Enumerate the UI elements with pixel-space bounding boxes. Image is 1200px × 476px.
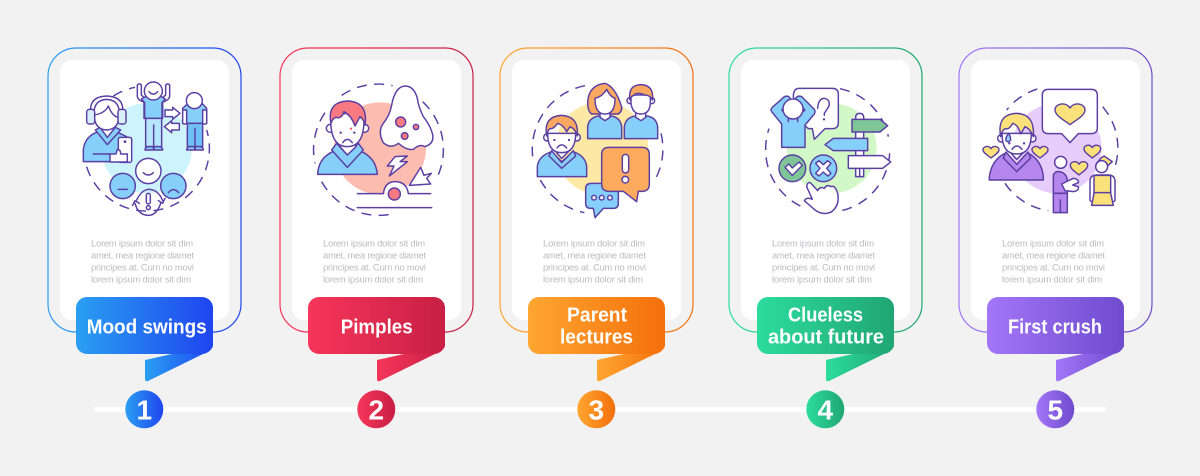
label tag: Mood swings bbox=[87, 316, 207, 338]
panel: Clueless about future bbox=[729, 48, 922, 428]
body text: amet, mea regione diamet bbox=[543, 250, 646, 261]
panel: Parent lectures bbox=[500, 48, 693, 428]
icon: first crush bbox=[983, 89, 1118, 213]
body text: amet, mea regione diamet bbox=[91, 250, 194, 261]
white inner card bbox=[741, 60, 910, 320]
label tag bbox=[757, 297, 894, 381]
label tag: First crush bbox=[1008, 316, 1102, 338]
label tag: Parent bbox=[567, 304, 627, 326]
step number 2 bbox=[357, 390, 395, 428]
label tag bbox=[987, 297, 1124, 381]
step number 4: 4 bbox=[818, 394, 834, 426]
step number 2: 2 bbox=[369, 394, 384, 426]
icon: mood swings teen bbox=[83, 82, 209, 215]
label tag: about future bbox=[768, 326, 884, 348]
white inner card bbox=[292, 60, 461, 320]
step number 5 bbox=[1036, 390, 1074, 428]
body text: principes at. Cum no movi bbox=[772, 262, 875, 273]
panel: Mood swings bbox=[48, 48, 241, 428]
body text: Lorem ipsum dolor sit dim bbox=[323, 238, 425, 249]
white inner card bbox=[971, 60, 1140, 320]
body text: principes at. Cum no movi bbox=[1002, 262, 1105, 273]
step number 5: 5 bbox=[1048, 394, 1063, 426]
body text: amet, mea regione diamet bbox=[323, 250, 426, 261]
card outline bbox=[500, 48, 693, 332]
body text: amet, mea regione diamet bbox=[772, 250, 875, 261]
label tag bbox=[76, 297, 213, 381]
icon: parent lectures bbox=[532, 83, 663, 218]
label tag: lectures bbox=[560, 326, 633, 348]
body text: Lorem ipsum dolor sit dim bbox=[91, 238, 193, 249]
step number 3 bbox=[577, 390, 615, 428]
body text: Lorem ipsum dolor sit dim bbox=[1002, 238, 1104, 249]
body text: lorem ipsum dolor sit dim bbox=[772, 274, 872, 285]
step number 4 bbox=[806, 390, 844, 428]
body text: amet, mea regione diamet bbox=[1002, 250, 1105, 261]
label tag bbox=[308, 297, 445, 381]
label tag: Pimples bbox=[341, 316, 413, 338]
step number 1 bbox=[125, 390, 163, 428]
panel: Pimples bbox=[280, 48, 473, 428]
card outline bbox=[48, 48, 241, 332]
label tag bbox=[528, 297, 665, 381]
panel: First crush bbox=[959, 48, 1152, 428]
body text: principes at. Cum no movi bbox=[323, 262, 426, 273]
body text: lorem ipsum dolor sit dim bbox=[1002, 274, 1102, 285]
body text: Lorem ipsum dolor sit dim bbox=[543, 238, 645, 249]
card outline bbox=[729, 48, 922, 332]
body text: lorem ipsum dolor sit dim bbox=[323, 274, 423, 285]
body text: principes at. Cum no movi bbox=[543, 262, 646, 273]
body text: principes at. Cum no movi bbox=[91, 262, 194, 273]
body text: lorem ipsum dolor sit dim bbox=[91, 274, 191, 285]
white inner card bbox=[512, 60, 681, 320]
white inner card bbox=[60, 60, 229, 320]
body text: lorem ipsum dolor sit dim bbox=[543, 274, 643, 285]
label tag: Clueless bbox=[788, 304, 863, 326]
step number 3: 3 bbox=[589, 394, 604, 426]
timeline bar bbox=[94, 407, 1106, 412]
body text: Lorem ipsum dolor sit dim bbox=[772, 238, 874, 249]
card outline bbox=[280, 48, 473, 332]
icon: clueless about future bbox=[766, 88, 891, 213]
icon: pimples bbox=[314, 84, 443, 215]
card outline bbox=[959, 48, 1152, 332]
step number 1: 1 bbox=[137, 394, 152, 426]
